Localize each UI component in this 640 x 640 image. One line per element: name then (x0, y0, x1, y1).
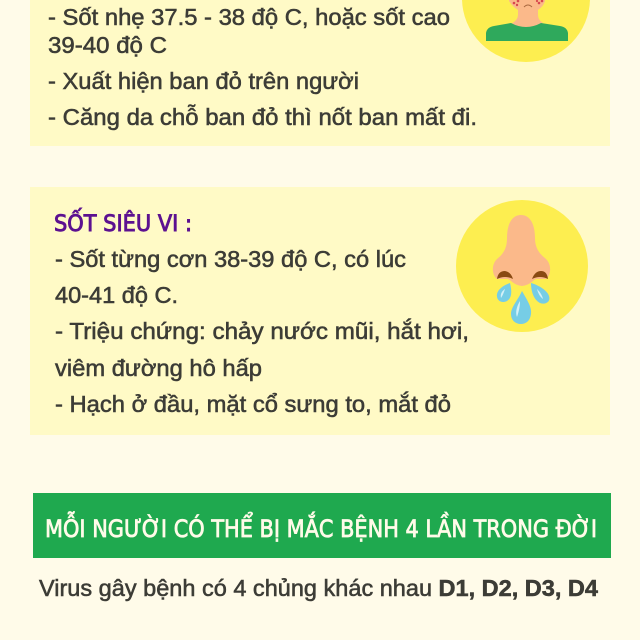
symptom text: viral fever list: - Triệu chứng: chảy nước mũi, hắt hơi, (55, 318, 469, 344)
symptom text: first list: - Căng da chỗ ban đỏ thì nốt ban mất đi. (48, 104, 477, 130)
panel: viral fever (30, 187, 610, 435)
symptom text: first list: - Xuất hiện ban đỏ trên người (48, 68, 359, 94)
symptom text: viral fever list: viêm đường hô hấp (55, 355, 262, 381)
icon: person with rash (462, 0, 590, 62)
panel: first symptoms (30, 0, 610, 146)
symptom text: viral fever list: 40-41 độ C. (55, 282, 178, 308)
icon: runny nose (456, 200, 588, 332)
banner: four infections (33, 493, 611, 558)
symptom text: first list (48, 4, 477, 130)
symptom text: viral fever list: - Sốt từng cơn 38-39 độ C, có lúc (55, 246, 406, 272)
symptom text: first list: 39-40 độ C (48, 32, 167, 58)
symptom text: viral fever list (55, 246, 469, 417)
symptom text: viral fever list: - Hạch ở đầu, mặt cổ sưng to, mắt đỏ (55, 391, 451, 417)
symptom text: first list: - Sốt nhẹ 37.5 - 38 độ C, hoặc sốt cao (48, 4, 450, 30)
text: virus strains: Virus gây bệnh có 4 chủng khác nhau D1, D2, D3, D4 (39, 575, 598, 601)
heading: viral fever: SỐT SIÊU VI : (54, 208, 192, 237)
